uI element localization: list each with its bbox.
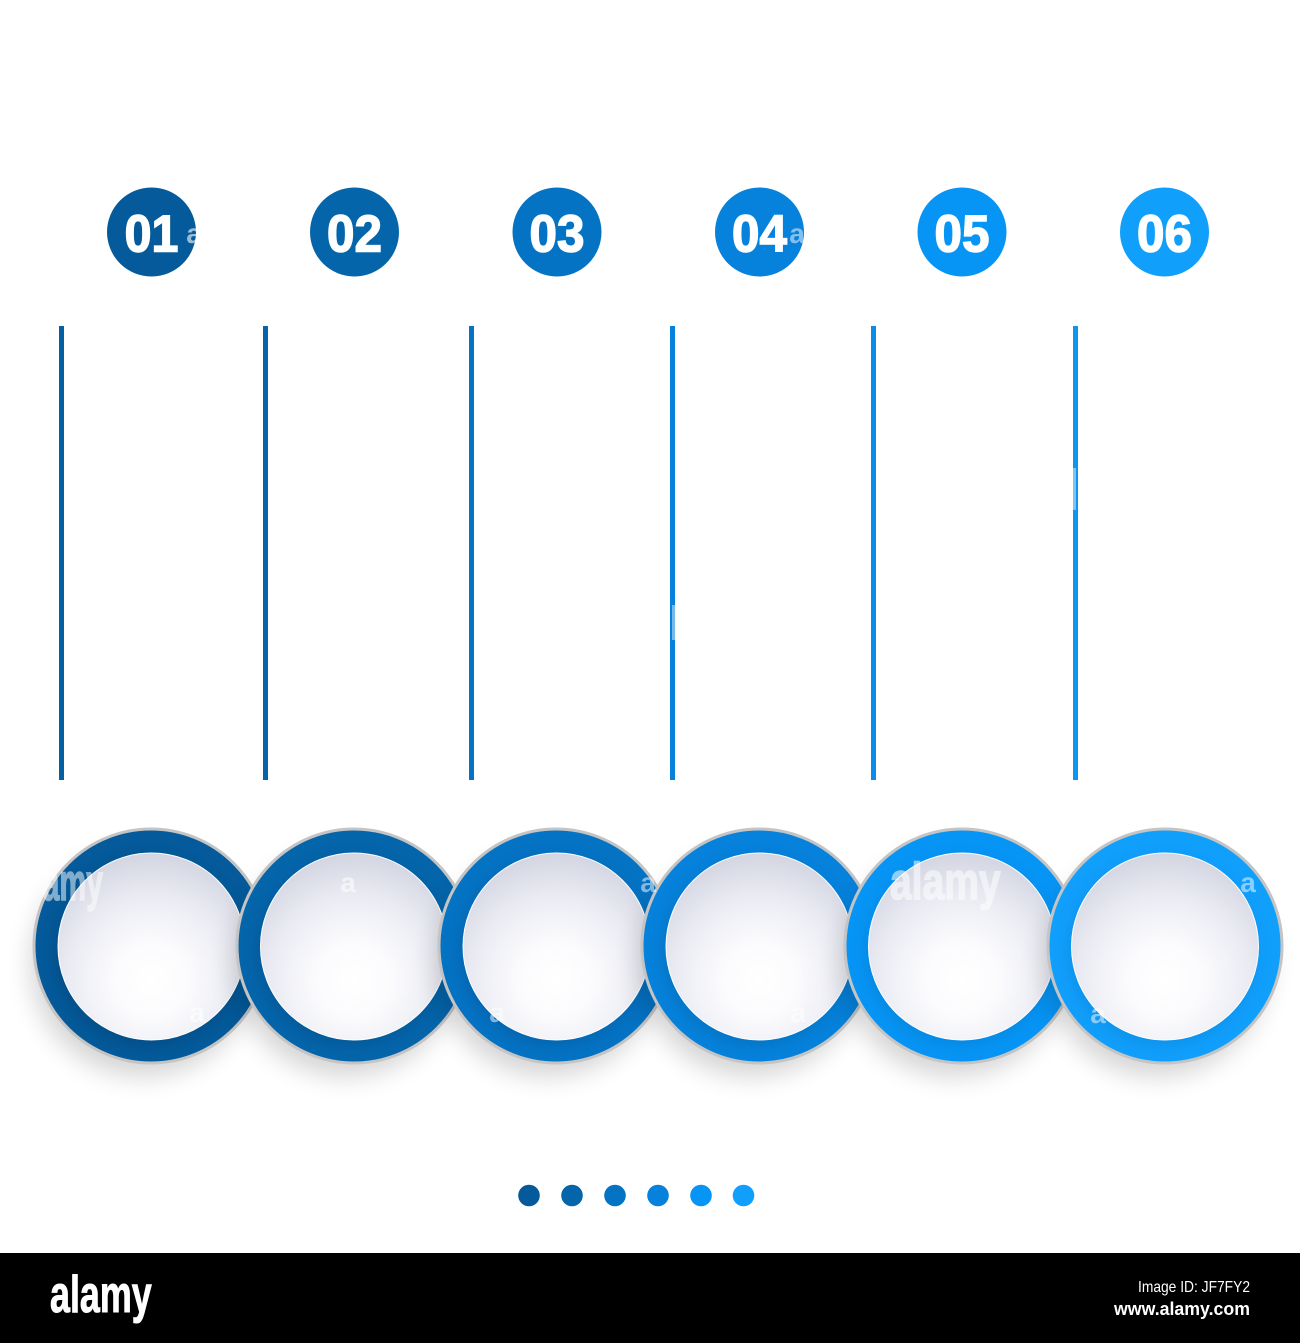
ring 5: [842, 829, 1079, 1076]
watermark fragments: a: [189, 997, 205, 1028]
watermark fragments: a: [1240, 867, 1256, 898]
badge 01: [107, 188, 196, 276]
badge 01: 01: [125, 205, 178, 263]
badge 03: [512, 188, 602, 276]
badge 02: 02: [327, 204, 382, 263]
watermark fragments: a: [340, 867, 356, 898]
ring 3: [436, 829, 673, 1076]
ring 1: [31, 829, 268, 1076]
badge 02: [310, 188, 399, 276]
vertical line 5: [871, 326, 876, 780]
pagination dots: [518, 1185, 754, 1206]
badge 06: [1120, 188, 1209, 276]
watermark fragments: a: [790, 997, 806, 1028]
badge 05: [918, 188, 1006, 276]
footer url: www.alamy.com: [1113, 1299, 1250, 1319]
badge 05: 05: [935, 204, 989, 263]
vertical line 6: [1073, 326, 1078, 780]
vertical line 1: [59, 326, 64, 780]
badge 06: 06: [1137, 204, 1192, 263]
vertical line 3: [469, 326, 474, 780]
watermark fragments: amy: [43, 855, 103, 912]
ring 6: [1045, 829, 1282, 1076]
watermark fragments: a: [1090, 998, 1106, 1029]
watermark fragments: [43, 218, 1256, 1029]
footer logo: alamy: [50, 1267, 152, 1324]
watermark fragments: alamy: [890, 851, 1001, 910]
vertical line 2: [263, 326, 268, 780]
footer image id: Image ID: JF7FY2: [1138, 1279, 1250, 1296]
watermark fragments: a: [489, 997, 505, 1028]
badge 04: [715, 188, 804, 276]
ring 2: [234, 829, 471, 1076]
badge 03: 03: [530, 204, 584, 263]
badge 04: 04: [732, 204, 787, 263]
footer bar: [0, 1253, 1300, 1343]
ring 4: [639, 829, 876, 1076]
vertical line 4: [670, 326, 675, 780]
watermark fragments: a: [186, 218, 202, 249]
watermark fragments: a: [789, 218, 805, 249]
watermark fragments: a: [640, 867, 656, 898]
